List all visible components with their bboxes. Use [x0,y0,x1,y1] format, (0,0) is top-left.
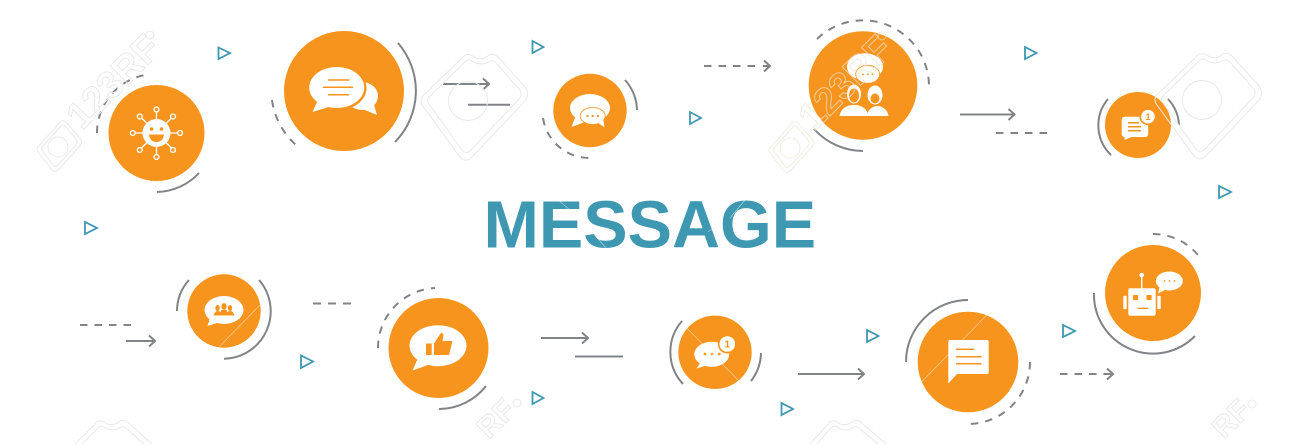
watermark: 123RF top center [769,28,901,172]
watermark: 123RF top left [37,27,169,172]
icon: two speech bubbles [308,66,378,115]
arrow: solid 3 [960,109,1014,120]
icon: two people with bubbles [840,53,888,116]
step 6: group chat bubble [177,274,271,359]
title: MESSAGE [484,188,816,262]
icon: bubble with people [204,296,244,326]
watermark: 123RF top left: 123RF [59,27,169,137]
step 9: message square bubble [906,300,1030,424]
icon: overlapping bubbles with dots [570,94,610,128]
arrow: solid 5 [541,332,588,344]
arrow: solid 1 [443,78,489,90]
step 3: nested chat bubbles [543,74,637,158]
step 4: people talking [809,20,929,151]
step 1: smiley network [97,75,204,192]
watermark: RF bottom right: RF [1206,393,1257,445]
icon: robot with bubble [1123,272,1183,316]
arrow: solid 6 [798,368,864,380]
icon: thumbs up in bubble [410,325,466,370]
step 2: conversation bubbles [272,31,416,151]
teal triangle markers [85,41,1231,415]
step 5: message notification [1098,92,1179,158]
step 8: chat notification [670,316,761,389]
watermark: 123RF top center: 123RF [791,28,901,138]
arrow: dashed 2 [704,60,770,72]
arrow: solid 4 [126,336,155,346]
step 7: thumbs up bubble [378,288,488,409]
arrows and connector lines [80,60,1113,380]
icon: bubble with notification badge: 1 [1145,112,1151,122]
arrow: dashed 7 [1060,368,1113,380]
watermark: RF bottom center: RF [471,393,522,445]
icon: square speech bubble [948,340,989,384]
icon: bubble with dots and badge: 1 [725,340,731,351]
step 10: chatbot [1094,234,1201,354]
icon: smiley network [130,107,182,159]
